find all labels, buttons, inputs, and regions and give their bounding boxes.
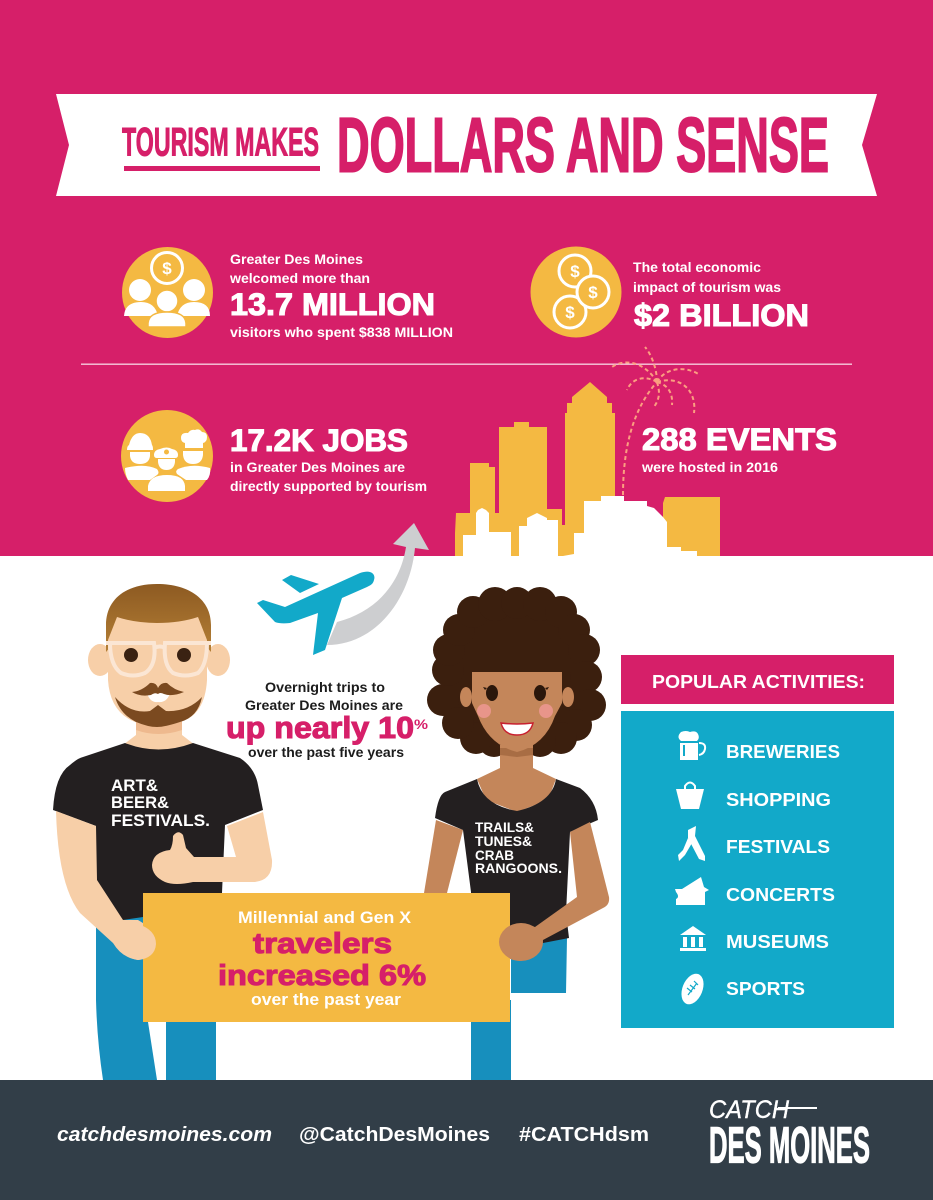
footer: website and social handles: #CATCHdsm	[519, 1124, 649, 1146]
sign: millennial travelers: over the past year	[251, 991, 402, 1009]
man: shirt	[53, 743, 263, 925]
icon: football	[677, 970, 708, 1008]
panel heading: popular activities: POPULAR ACTIVITIES:	[652, 672, 865, 692]
man: hair	[106, 584, 211, 652]
stat: 13.7 million visitors: 13.7 MILLION	[230, 286, 435, 322]
stat: 288 events: were hosted in 2016	[641, 459, 778, 475]
sign: millennial travelers: travelers	[253, 928, 392, 960]
sign: millennial travelers	[143, 893, 510, 1022]
skyline: yellow buildings	[455, 382, 720, 556]
woman: ears	[460, 687, 574, 707]
man: beard	[115, 697, 202, 727]
text: overnight trips: up nearly 10	[226, 710, 414, 745]
icon: brush and pencil	[678, 826, 705, 861]
stat: $2 billion impact	[633, 259, 809, 333]
woman: hand over sign	[499, 923, 543, 961]
man: shirt text: ART&	[111, 777, 158, 795]
stat: 17.2K jobs	[230, 422, 427, 494]
stat: 13.7 million visitors: visitors who spent $838 MILLION	[230, 324, 453, 340]
character: man	[53, 584, 272, 1080]
icon: tourism workers	[121, 410, 213, 502]
woman: smile	[501, 723, 533, 735]
text: overnight trips: Greater Des Moines are	[245, 698, 404, 713]
man: shirt text	[111, 777, 210, 830]
icon: stacked coins: $	[570, 262, 580, 281]
stat: 17.2K jobs: 17.2K JOBS	[230, 422, 408, 458]
icon: museum	[680, 926, 706, 951]
woman: shirt text: TRAILS&	[475, 820, 534, 835]
stat: 13.7 million visitors	[229, 251, 453, 340]
icon: stacked coins: $	[565, 303, 575, 322]
label: sports: SPORTS	[726, 979, 805, 999]
panel: footer	[0, 1080, 933, 1200]
icon: visitors with dollar coin	[122, 247, 213, 338]
icon: airplane	[257, 572, 374, 655]
man: moustache	[132, 683, 184, 696]
logo: catch des moines: CATCH	[709, 1096, 790, 1124]
skyline: white buildings	[463, 496, 697, 556]
sign: millennial travelers: increased 6%	[218, 960, 426, 992]
title banner	[56, 94, 877, 196]
stat: 288 events: 288 EVENTS	[642, 421, 837, 457]
stat: 17.2K jobs: directly supported by tourism	[230, 478, 427, 494]
label: festivals: FESTIVALS	[726, 837, 830, 857]
woman: shirt text: TUNES&	[475, 834, 532, 849]
man: neck	[123, 715, 195, 755]
woman: shirt text: RANGOONS.	[475, 861, 562, 876]
stat: 288 events	[641, 421, 837, 475]
logo: catch des moines	[709, 1096, 870, 1174]
woman: hair	[427, 587, 606, 757]
man: eyes	[124, 648, 191, 662]
man: hand over sign	[116, 924, 156, 960]
stat: $2 billion impact: $2 BILLION	[634, 297, 809, 333]
panel: pink header background	[0, 0, 933, 556]
label: concerts: CONCERTS	[726, 885, 835, 905]
panel heading: popular activities	[621, 655, 894, 704]
stat: 17.2K jobs: in Greater Des Moines are	[230, 459, 405, 475]
woman: right arm and hand	[500, 822, 609, 961]
text: overnight trips: over the past five years	[248, 745, 404, 760]
man: trousers	[96, 916, 216, 1080]
man: glasses	[106, 643, 211, 676]
sign: millennial travelers: Millennial and Gen X	[238, 909, 411, 927]
fireworks	[612, 347, 700, 495]
label: shopping: SHOPPING	[726, 790, 831, 810]
icon: shopping bag	[676, 782, 704, 809]
icon: stacked coins	[530, 246, 622, 338]
stat: 13.7 million visitors: welcomed more than	[229, 270, 370, 286]
woman: cheeks	[477, 704, 553, 718]
title banner: TOURISM MAKES	[122, 120, 319, 164]
woman: shirt	[435, 779, 598, 943]
character: woman	[424, 587, 609, 1080]
stat: 13.7 million visitors: Greater Des Moines	[230, 251, 363, 267]
woman: shirt text: CRAB	[475, 848, 514, 863]
stat: $2 billion impact: impact of tourism was	[633, 279, 781, 295]
icon: beer mug	[678, 731, 705, 760]
text: overnight trips	[226, 680, 429, 760]
man: shirt text: FESTIVALS.	[111, 812, 210, 830]
text: overnight trips: Overnight trips to	[265, 680, 385, 695]
label: breweries: BREWERIES	[726, 742, 840, 762]
panel: activities list	[621, 711, 894, 1028]
woman: shirt text	[475, 820, 562, 876]
man: right arm with thumbs up	[152, 812, 272, 884]
icon: stacked coins: $	[588, 283, 598, 302]
woman: trousers	[471, 938, 567, 1080]
footer: website and social handles: catchdesmoines.com	[57, 1124, 272, 1146]
man: left arm	[56, 811, 156, 960]
footer: website and social handles	[57, 1124, 649, 1146]
man: face	[108, 617, 207, 726]
woman: eyes	[483, 685, 549, 701]
text: overnight trips: %	[414, 716, 429, 732]
woman: face	[472, 672, 562, 752]
man: shirt text: BEER&	[111, 794, 169, 812]
woman: neck and chest	[477, 745, 556, 812]
woman: left arm	[424, 820, 463, 893]
footer: website and social handles: @CatchDesMoines	[299, 1124, 490, 1146]
arrow: upward trend	[327, 523, 429, 645]
man: neck shadow	[136, 720, 182, 734]
man: mouth	[147, 693, 170, 702]
icon: tickets	[675, 877, 709, 905]
icon: visitors with dollar coin: $	[162, 259, 172, 278]
stat: $2 billion impact: The total economic	[633, 259, 761, 275]
man: ears	[88, 644, 230, 676]
label: museums: MUSEUMS	[726, 932, 829, 952]
